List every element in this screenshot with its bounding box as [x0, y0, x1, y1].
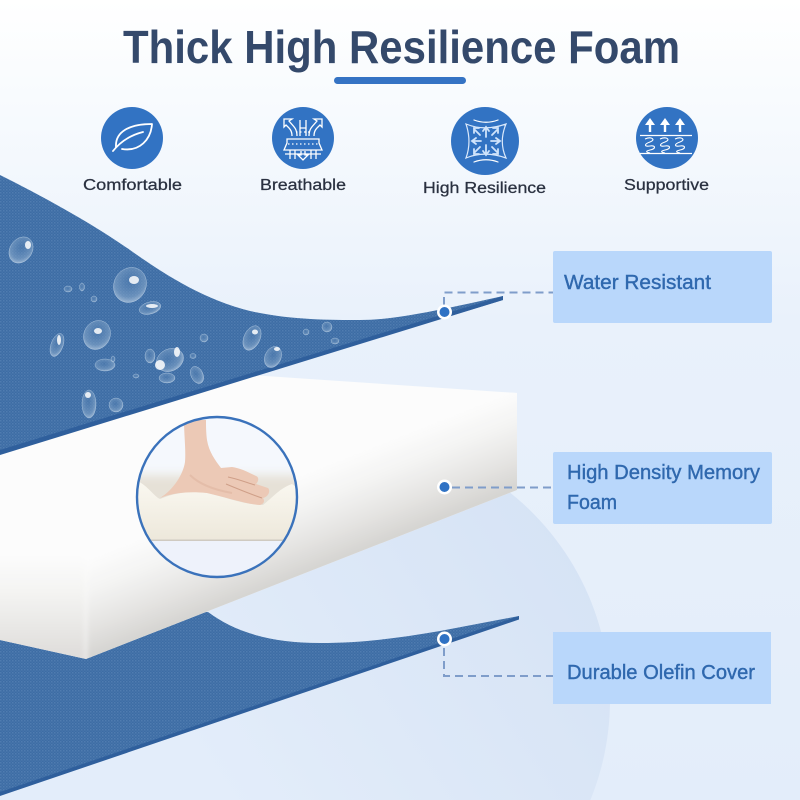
callout: Durable Olefin Cover: Durable Olefin Cover	[567, 661, 755, 684]
feature: Comfortable	[83, 107, 182, 194]
droplet highlights	[25, 241, 280, 398]
feature: Breathable	[260, 107, 346, 194]
feature: High Resilience	[423, 107, 546, 197]
feature: High Resilience: High Resilience	[423, 180, 546, 197]
foam back wall	[140, 472, 295, 505]
callout: High Density Memory Foam	[437, 452, 772, 524]
callout: High Density Memory Foam: High Density Memory	[567, 461, 761, 484]
water droplets	[4, 232, 339, 418]
icon: airflow through foam	[284, 119, 322, 160]
memory foam block	[0, 376, 517, 659]
callout: Water Resistant: Water Resistant	[564, 271, 711, 294]
callout: Water Resistant	[437, 251, 772, 323]
feature: Supportive	[624, 107, 709, 194]
foam cross-section	[138, 482, 296, 540]
callout: Durable Olefin Cover	[437, 632, 771, 704]
title: Thick High Resilience Foam	[123, 21, 680, 73]
top water-resistant fabric with droplets	[0, 175, 503, 455]
feature: Comfortable: Comfortable	[83, 177, 182, 194]
icon: leaf	[113, 124, 152, 151]
icon: pillow with outward arrows	[466, 120, 506, 162]
inset: hand pressing memory foam	[130, 417, 300, 581]
hand	[160, 420, 269, 505]
feature: Supportive: Supportive	[624, 177, 709, 194]
bottom olefin cover fabric	[0, 612, 519, 796]
callout: High Density Memory Foam: Foam	[567, 491, 617, 514]
feature: Breathable: Breathable	[260, 177, 346, 194]
icon: springs and arrows	[640, 118, 692, 154]
